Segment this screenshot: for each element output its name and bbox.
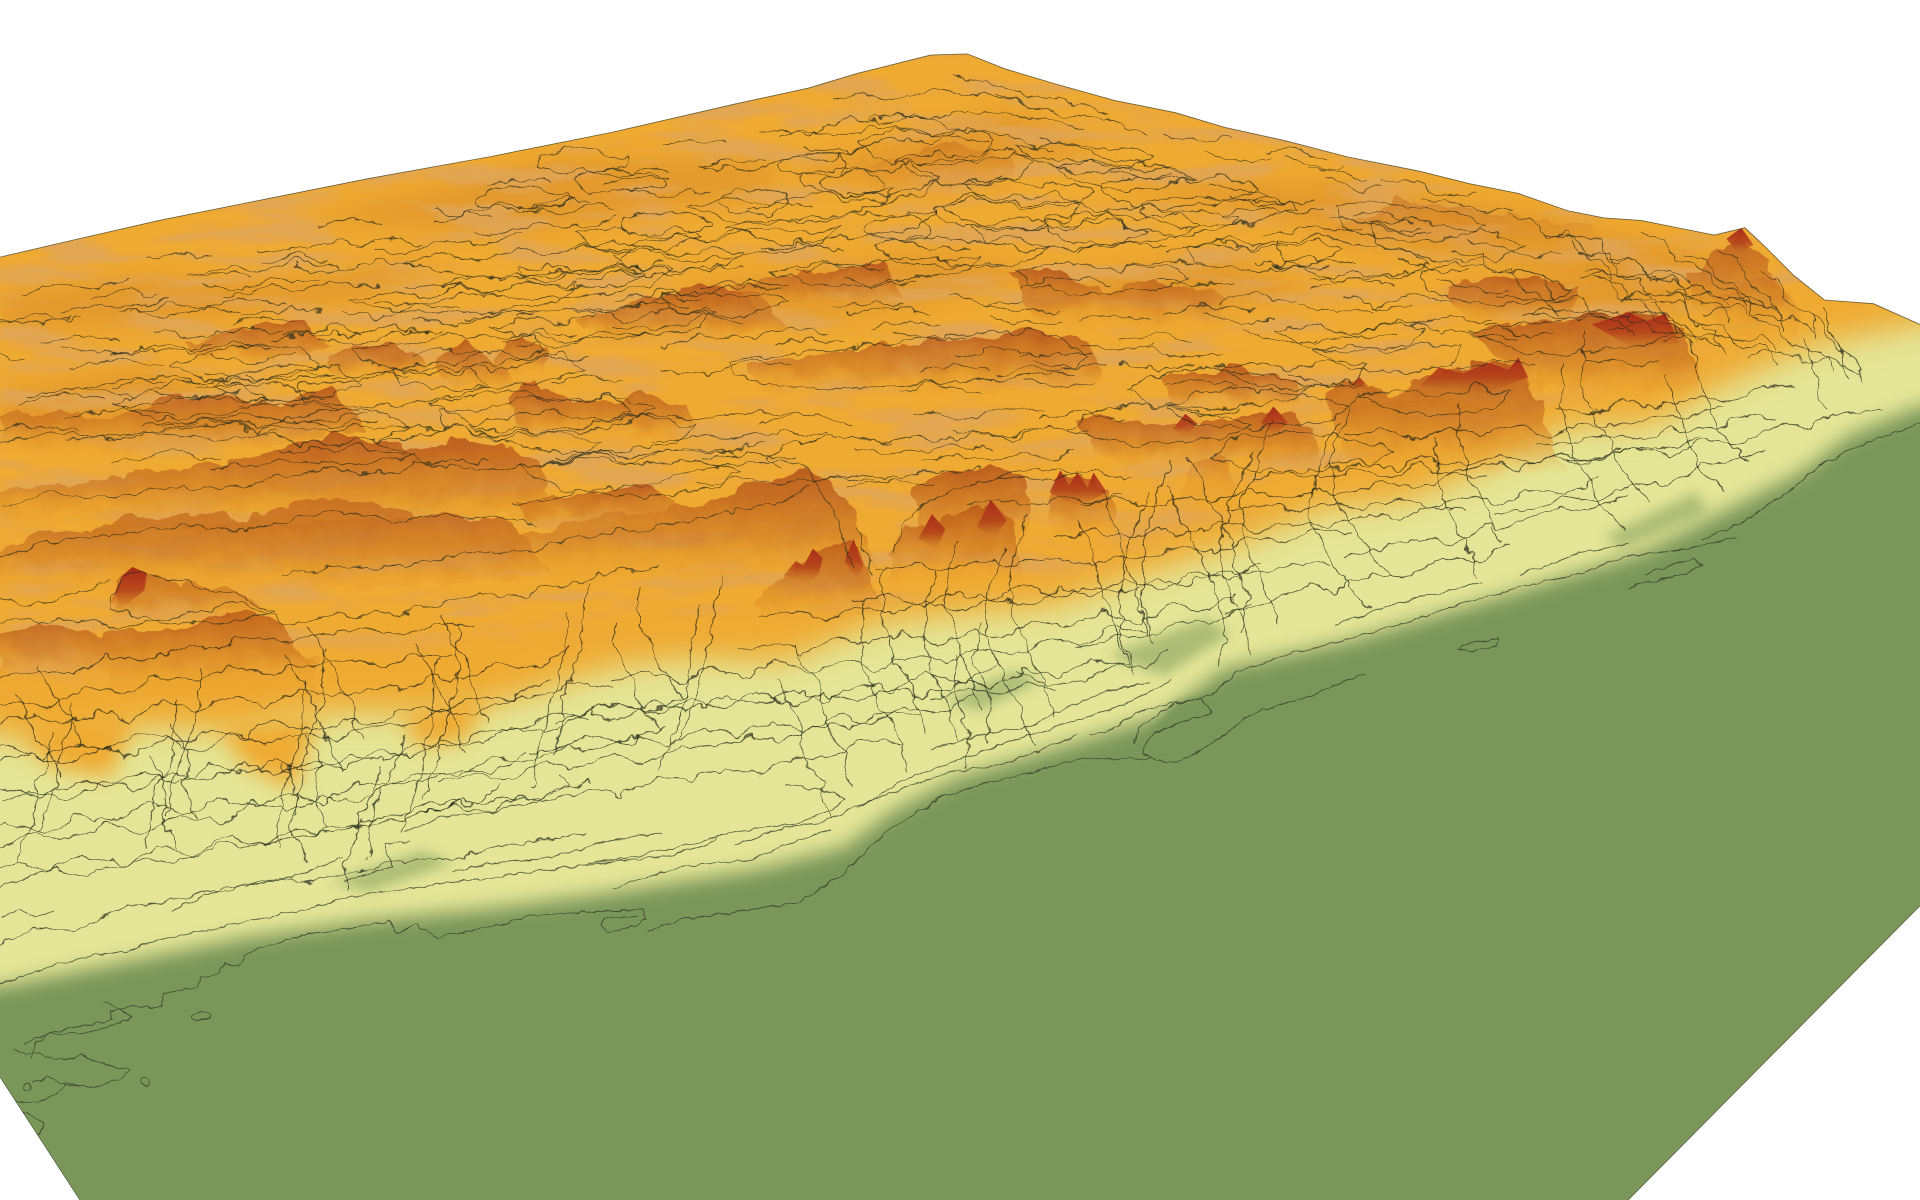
terrain top outline [0, 54, 1920, 324]
coastal bay [1151, 694, 1206, 731]
orange upland [0, 0, 1920, 749]
terrain bottom edge line [0, 906, 1920, 1200]
dark ridge bands [0, 141, 1800, 722]
broad upland shading [0, 110, 1763, 429]
lowland green base [0, 316, 1920, 1200]
green inlet shading [331, 492, 1708, 891]
streaked terrain texture [0, 54, 1802, 682]
contour lines: offshore green [10, 735, 1224, 1142]
contour lines: escarpment [0, 306, 1881, 943]
contour lines: upland [0, 76, 1866, 627]
red summit peaks [110, 228, 1753, 610]
contour lines: coastal plain [0, 424, 1920, 983]
orange lobes into foothills [24, 692, 490, 790]
pale yellow foothill band [0, 309, 1920, 1000]
